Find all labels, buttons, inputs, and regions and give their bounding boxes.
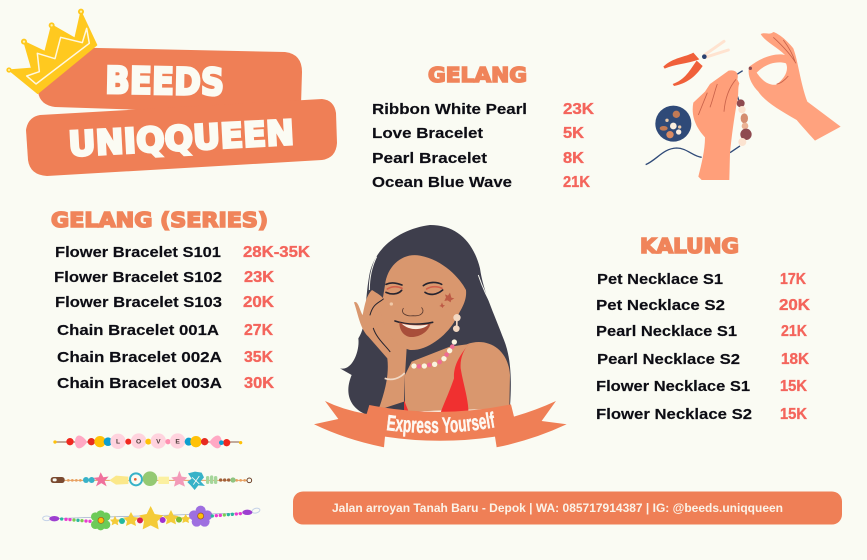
earrings	[453, 314, 461, 332]
list: Gelang	[372, 101, 595, 191]
list: Kalung: Pearl Necklace S2	[597, 351, 740, 368]
body	[405, 342, 510, 412]
list: Gelang: 8K	[563, 150, 585, 167]
list: Gelang series	[54, 244, 311, 392]
illustration: hands stringing beads	[646, 32, 841, 180]
illustration: smiling woman with ribbon	[314, 225, 567, 447]
bracelet: love	[53, 433, 242, 449]
bracelet: ocean	[51, 471, 252, 490]
icon: pliers	[663, 41, 728, 86]
list: Kalung: 17K	[780, 271, 807, 288]
heading: Gelang (Series): GELANG (SERIES)	[51, 208, 268, 232]
mouth	[399, 322, 431, 337]
list: Gelang: 23K	[563, 101, 595, 118]
list: Gelang series: Flower Bracelet S102	[54, 269, 222, 286]
heading: Kalung: KALUNG	[640, 234, 739, 258]
list: Kalung: Pearl Necklace S1	[596, 323, 737, 340]
face	[381, 255, 466, 350]
list: Gelang series: Chain Bracelet 003A	[57, 375, 222, 392]
list: Gelang series: 23K	[244, 269, 275, 286]
title banner: Beeds Uniqqueen	[26, 47, 337, 176]
list: Kalung: 18K	[781, 351, 810, 368]
title word: BEEDS: BEEDS	[105, 59, 225, 104]
thread	[646, 71, 743, 165]
bracelet	[385, 373, 405, 379]
list: Gelang: 5K	[563, 125, 585, 142]
hair highlights	[369, 257, 494, 310]
red top	[440, 343, 469, 415]
list: Gelang series: 27K	[244, 322, 274, 339]
list: Gelang: Pearl Bracelet	[372, 150, 487, 167]
list: Gelang series: 20K	[243, 294, 275, 311]
beads	[737, 99, 752, 146]
list: Kalung	[596, 271, 811, 423]
heading: Gelang: GELANG	[428, 63, 527, 87]
list: Gelang series: 35K	[244, 349, 274, 366]
bracelet: stars and flowers	[43, 506, 260, 530]
list: Gelang: Ribbon White Pearl	[372, 101, 527, 118]
facial features	[370, 282, 443, 352]
list: Gelang: Love Bracelet	[372, 125, 483, 142]
icon: left hand	[693, 70, 739, 180]
banner shape: bottom	[26, 99, 337, 176]
list: Kalung: Pet Necklace S2	[596, 297, 725, 314]
list: Gelang: 21K	[563, 174, 591, 191]
icon: bead dish	[655, 106, 691, 142]
footer contact bar	[293, 492, 842, 524]
star freckles	[444, 293, 454, 302]
list: Gelang series: 28K-35K	[243, 244, 311, 261]
bracelet: love: O	[136, 438, 141, 445]
arm and hand	[354, 290, 407, 410]
bead necklace	[411, 339, 457, 369]
list: Kalung: 15K	[780, 378, 808, 395]
icon: crown	[6, 9, 97, 93]
list: Kalung: 21K	[781, 323, 808, 340]
list: Kalung: 15K	[780, 406, 808, 423]
list: Gelang: Ocean Blue Wave	[372, 174, 512, 191]
eyeshadow	[387, 287, 442, 289]
list: Kalung: 20K	[779, 297, 811, 314]
list: Gelang series: 30K	[244, 375, 275, 392]
list: Gelang series: Chain Bracelet 001A	[57, 322, 219, 339]
list: Gelang series: Flower Bracelet S101	[55, 244, 221, 261]
list: Kalung: Pet Necklace S1	[597, 271, 723, 288]
hair	[340, 225, 511, 414]
bracelet: love: E	[175, 438, 180, 445]
bracelet: love: V	[156, 438, 161, 445]
list: Kalung: Flower Necklace S1	[596, 378, 750, 395]
list: Gelang series: Flower Bracelet S103	[55, 294, 222, 311]
list: Kalung: Flower Necklace S2	[596, 406, 752, 423]
bracelets	[43, 433, 260, 530]
bracelet: love: L	[116, 439, 120, 446]
list: Gelang series: Chain Bracelet 002A	[57, 349, 222, 366]
ribbon text: Express Yourself: Express Yourself	[386, 411, 494, 437]
ribbon	[314, 401, 567, 447]
icon: right hand	[749, 32, 841, 141]
banner shape: top	[38, 47, 302, 110]
title word: UNIQQUEEN: UNIQQUEEN	[67, 113, 295, 165]
contact text: Jalan arroyan Tanah Baru - Depok | WA: 085717914387 | IG: @beeds.uniqqueen	[332, 503, 783, 515]
